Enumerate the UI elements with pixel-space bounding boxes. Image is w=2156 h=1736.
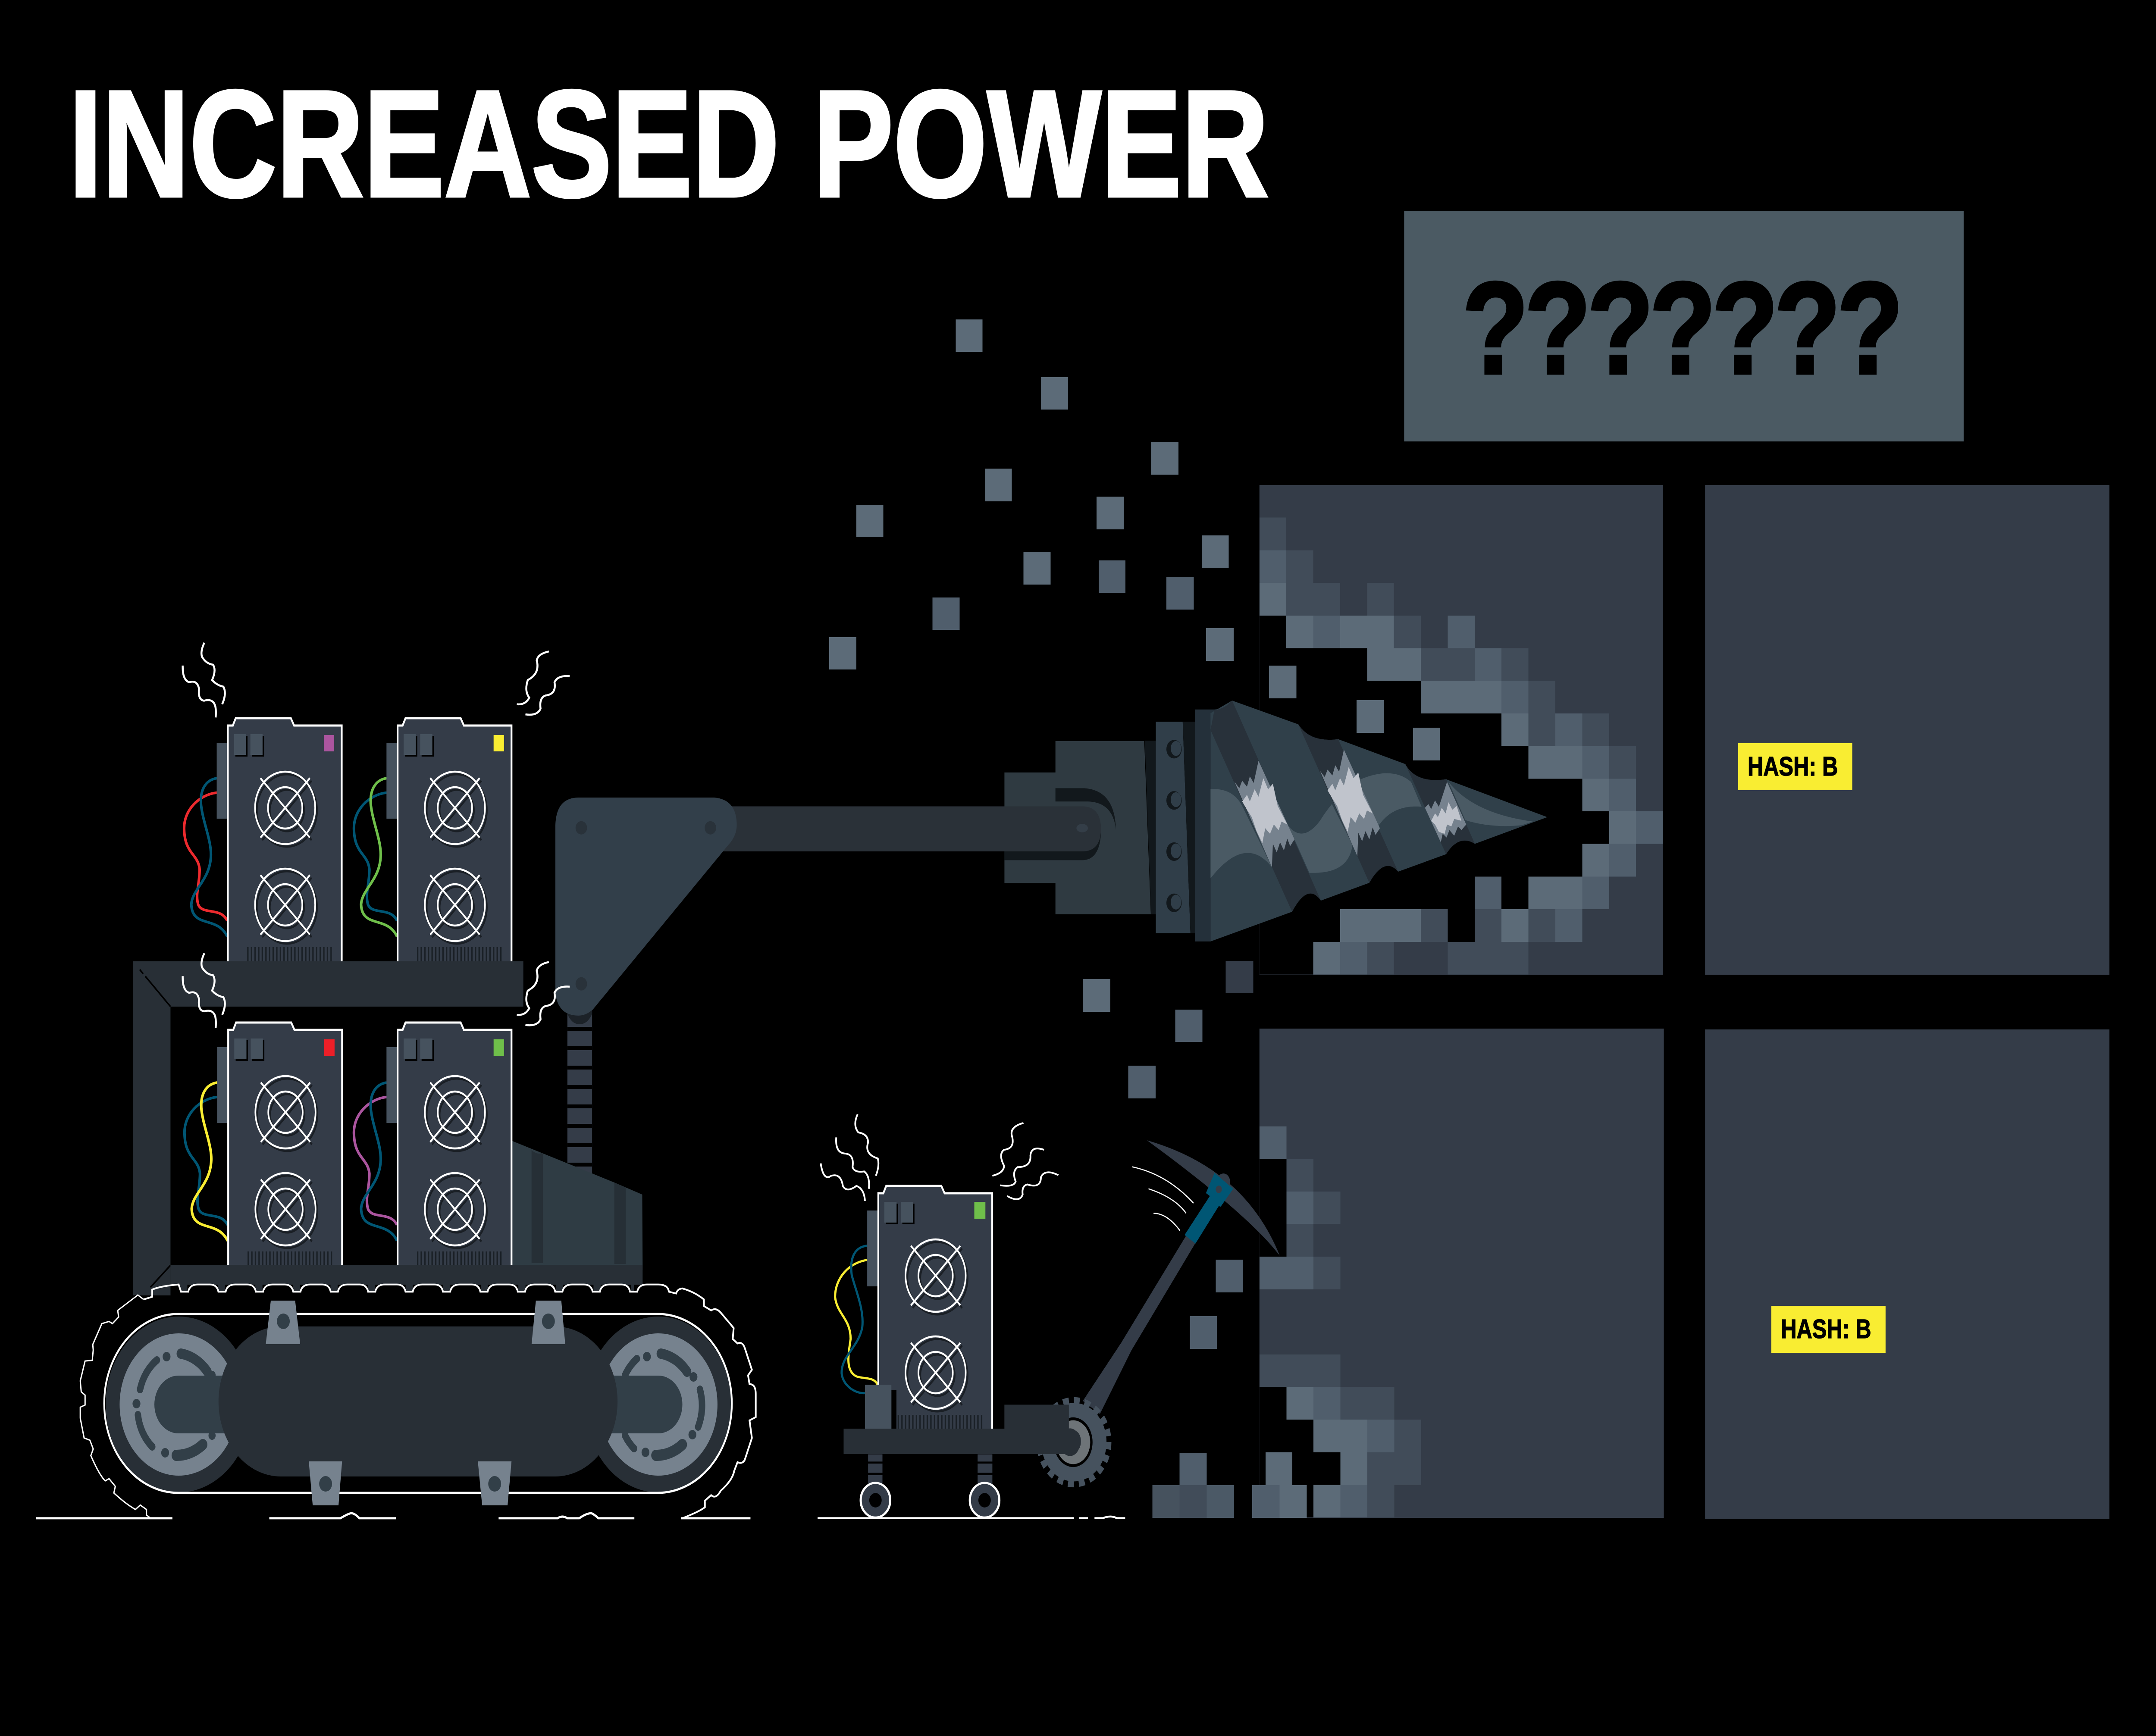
swing motion lines <box>1132 1167 1194 1231</box>
track centre body <box>219 1326 617 1476</box>
cart deck <box>843 1429 1081 1454</box>
small miner cart with pickaxe <box>835 1140 1280 1483</box>
hash label: HASH: B <box>1781 1314 1871 1344</box>
cart legs <box>868 1454 992 1484</box>
panel: drilled block top left <box>1260 485 1663 975</box>
arm shadow <box>1004 788 1116 860</box>
right drive wheel <box>582 1317 731 1492</box>
drill flange <box>1145 701 1232 942</box>
inner belt outline <box>104 1314 732 1493</box>
gear wheel <box>1040 1401 1108 1483</box>
cart base <box>818 1114 1125 1518</box>
hash label <box>1738 743 1852 790</box>
drill cone <box>1210 701 1547 942</box>
rig engine housing <box>511 1141 642 1265</box>
drill mount block and arm <box>722 741 1151 914</box>
question marks: ??????? <box>1462 255 1903 401</box>
hash label <box>1771 1306 1886 1353</box>
panel: mined block bottom left <box>1260 1029 1664 1518</box>
arm bar <box>722 806 1101 851</box>
power block <box>865 1385 896 1429</box>
cart wheels <box>861 1483 1000 1517</box>
flying block debris <box>829 319 1440 1349</box>
rig frame <box>133 961 642 1295</box>
drill friction sparks <box>1235 750 1466 867</box>
unknown hash panel <box>1404 211 1964 441</box>
title: INCREASED POWER <box>69 59 1269 228</box>
track outer outline <box>80 1285 756 1518</box>
heat squiggles on large rig <box>183 643 570 1028</box>
cart box <box>1004 1404 1069 1429</box>
pick handle <box>1083 1235 1195 1414</box>
miner: bottom right with green light <box>354 1023 511 1266</box>
panel: hash block bottom right <box>1705 1029 2109 1519</box>
small miner unit <box>867 1186 992 1429</box>
cart wires <box>835 1245 878 1393</box>
drill highlights <box>1210 773 1533 879</box>
drill flutes <box>1210 701 1475 912</box>
rig lower shelf top <box>170 1265 642 1270</box>
miner: top right with yellow light <box>354 718 511 961</box>
left drive wheel <box>106 1317 255 1492</box>
ground line under cart <box>818 1517 1125 1518</box>
pick head <box>1147 1140 1280 1256</box>
triangular arm bracket <box>555 798 737 1016</box>
spiral drill head <box>1145 701 1547 942</box>
ground line under tank <box>36 1513 750 1518</box>
tank track assembly <box>104 1301 732 1505</box>
mount block <box>1004 741 1151 914</box>
hash label: HASH: B <box>1748 752 1838 782</box>
rubble piles <box>1152 1452 1307 1518</box>
track lugs <box>266 1301 565 1505</box>
miner: bottom left with red light <box>185 1023 342 1266</box>
miner: top left with purple light <box>184 718 342 961</box>
panel: hash block top right <box>1705 485 2109 975</box>
ribbed lift column <box>567 1009 592 1175</box>
rig middle shelf <box>133 961 523 1007</box>
heat squiggles on small miner <box>821 1114 1059 1201</box>
